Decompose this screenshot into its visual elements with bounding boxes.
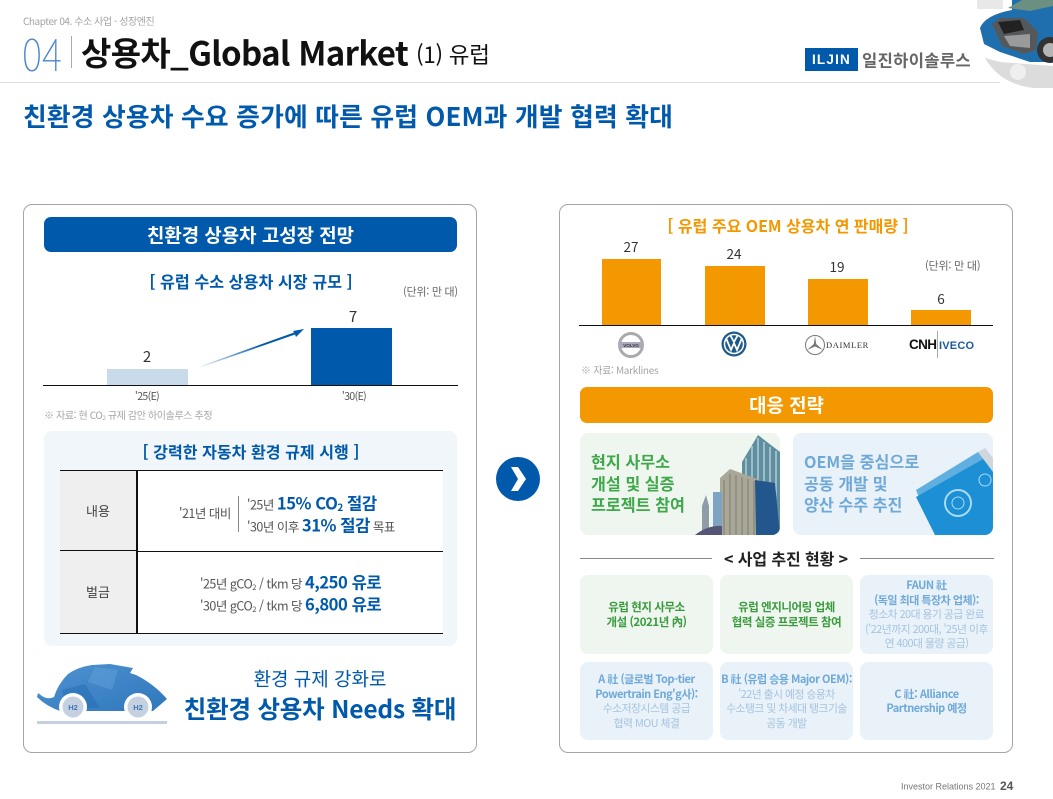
panel heading: growth outlook: 친환경 상용차 고성장 전망 [147, 221, 354, 248]
panel: right OEM [559, 204, 1013, 753]
bar chart: hydrogen market: 2 [143, 346, 151, 367]
status card: company C [860, 662, 993, 740]
status card: company B: 공동 개발 [766, 714, 807, 730]
status card: office: 개설 (2021년 內) [606, 614, 687, 630]
status card: FAUN: 연 400대 물량 공급) [885, 635, 968, 651]
strategy text: OEM development: 공동 개발 및 [804, 470, 888, 494]
arrow: chevron between panels [496, 457, 540, 501]
bar chart: OEM sales: 19 [830, 256, 844, 276]
status card: FAUN [860, 575, 993, 654]
image: buildings [695, 435, 780, 535]
panel: regulations [44, 431, 457, 646]
conclusion headline: 친환경 상용차 Needs 확대 [184, 691, 456, 726]
source note: ※ 자료: Marklines [581, 362, 658, 377]
bar chart: hydrogen market [43, 306, 458, 404]
bar chart: OEM sales: 24 [726, 243, 742, 263]
strategy text: local office: 프로젝트 참여 [591, 492, 685, 516]
strategy card: OEM development [793, 433, 993, 535]
logo: ILJIN [805, 48, 858, 71]
strategy text: OEM development [804, 449, 919, 516]
page subtitle: (1) 유럽 [416, 38, 490, 70]
strategy card: local office [580, 433, 780, 535]
row label: content [60, 471, 136, 551]
bar chart: hydrogen market: '25(E) [135, 389, 159, 404]
status card: FAUN: FAUN 社 [906, 577, 947, 593]
bar chart: OEM sales: 27 [624, 236, 638, 256]
status card: office: 유럽 현지 사무소 [608, 599, 685, 615]
regulations table [60, 470, 443, 634]
panel heading: growth outlook [44, 217, 457, 252]
status card: company C: C 社: Alliance [894, 686, 959, 702]
company name: 일진하이솔루스 [862, 48, 971, 72]
OEM chart unit: (단위: 만 대) [925, 258, 980, 274]
row label: penalty [60, 551, 136, 633]
conclusion subline: 환경 규제 강화로 [253, 664, 387, 692]
target 2025: '25년 15% CO2 절감 [247, 491, 377, 515]
status card: company A: Powertrain Eng'g사): [595, 686, 698, 702]
logo: ILJIN: ILJIN [812, 52, 851, 67]
strategy text: local office: 현지 사무소 [591, 449, 670, 473]
icon: leaf car: H2 [133, 703, 143, 712]
logo: CNH Iveco: IVECO [939, 340, 974, 352]
bar chart: OEM sales: 6 [937, 288, 945, 308]
status card: engineering [720, 575, 853, 654]
baseline year: '21년 대비 [179, 503, 231, 522]
table vertical rule [136, 471, 138, 633]
panel: left growth outlook [23, 204, 477, 753]
image: blueprints [916, 448, 993, 535]
image: car cutaway [977, 0, 1053, 88]
status card: engineering: 협력 실증 프로젝트 참여 [732, 614, 841, 630]
status card: office [580, 575, 713, 654]
logo: Volkswagen [722, 332, 746, 356]
status card: company B: B 社 (유럽 승용 Major OEM): [721, 671, 852, 687]
logo: Volvo [618, 332, 644, 358]
header chapter label: Chapter 04. 수소 사업 - 성장엔진 [23, 13, 154, 28]
divider line right [860, 558, 994, 559]
status card: company A: 수소저장시스템 공급 [603, 700, 690, 716]
bar chart: hydrogen market: 7 [349, 306, 357, 327]
business status heading: < 사업 추진 현황 > [724, 546, 848, 570]
status card: company A [580, 662, 713, 740]
status card: FAUN: 청소차 20대 용기 공급 완료 [869, 606, 984, 622]
chart unit: (단위: 만 대) [403, 284, 458, 300]
header divider [71, 36, 72, 68]
main headline: 친환경 상용차 수요 증가에 따른 유럽 OEM과 개발 협력 확대 [23, 97, 673, 134]
row label: penalty: 벌금 [86, 582, 110, 601]
status card: company A: A 社 (글로벌 Top-tier [598, 671, 695, 687]
header rule [0, 82, 1000, 83]
OEM chart title: [ 유럽 주요 OEM 상용차 연 판매량 ] [667, 213, 909, 237]
bar chart: hydrogen market: '30(E) [342, 389, 366, 404]
strategy text: local office: 개설 및 실증 [591, 470, 675, 494]
status card: engineering: 유럽 엔지니어링 업체 [738, 599, 835, 615]
status card: company B [720, 662, 853, 740]
logo: CNH Iveco: CNH [909, 337, 936, 352]
status card: company B: 수소탱크 및 차세대 탱크기술 [726, 700, 847, 716]
section number: 04 [22, 20, 62, 84]
status card: company A: 협력 MOU 체결 [614, 714, 679, 730]
page title: 상용차_Global Market [81, 28, 408, 76]
panel heading: response strategy [580, 387, 993, 423]
logo: CNH Iveco [909, 331, 974, 358]
table row rule [136, 551, 443, 552]
status card: company C: Partnership 예정 [886, 700, 967, 716]
bar chart: OEM sales [579, 236, 993, 326]
status card: FAUN: (독일 최대 특장차 업체): [874, 592, 979, 608]
logo: Volvo: VOLVO [623, 343, 639, 348]
status card: company B: '22년 출시 예정 승용차 [738, 686, 835, 702]
divider line left [580, 558, 712, 559]
page number: 24 [1000, 779, 1013, 793]
inner divider [238, 496, 239, 532]
chart title: [ 유럽 수소 상용차 시장 규모 ] [149, 269, 353, 293]
source note: ※ 자료: 현 CO2 규제 감안 하이솔루스 추정 [44, 407, 212, 422]
icon: leaf car [37, 664, 167, 724]
regulations heading: [ 강력한 자동차 환경 규제 시행 ] [143, 439, 359, 463]
footer: Investor Relations 2021 [901, 782, 996, 792]
strategy text: local office [591, 449, 685, 516]
panel heading: response strategy: 대응 전략 [749, 391, 824, 418]
penalty 2025: '25년 gCO2 / tkm 당 4,250 유로 [200, 570, 381, 594]
penalty 2030: '30년 gCO2 / tkm 당 6,800 유로 [200, 592, 381, 616]
strategy text: OEM development: 양산 수주 추진 [804, 492, 902, 516]
strategy text: OEM development: OEM을 중심으로 [804, 449, 919, 473]
logo: Daimler [805, 335, 869, 355]
row label: content: 내용 [86, 501, 110, 520]
target 2030: '30년 이후 31% 절감 목표 [247, 513, 395, 537]
icon: leaf car: H2 [68, 703, 78, 712]
logo: Daimler: DAIMLER [826, 340, 869, 350]
status card: FAUN: ('22년까지 200대, '25년 이후 [865, 621, 988, 637]
